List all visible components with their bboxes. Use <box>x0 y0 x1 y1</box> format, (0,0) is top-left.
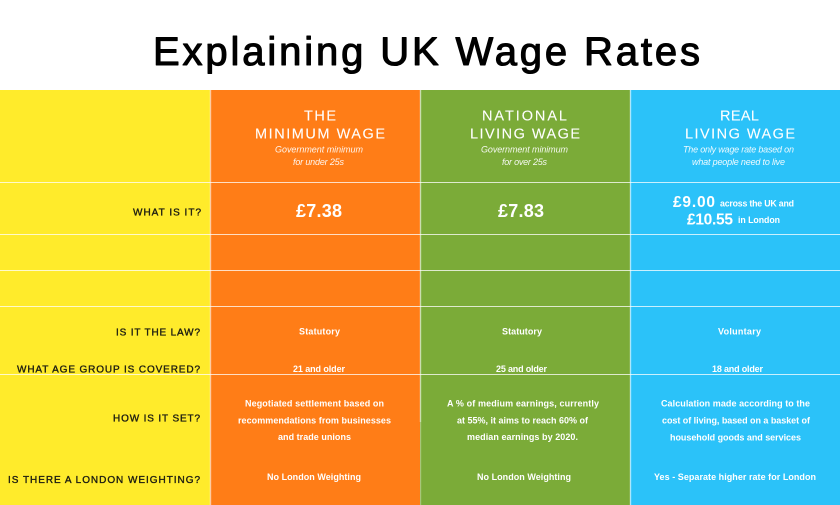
heading: real living wage: REAL <box>720 109 759 125</box>
panel: minimum wage column <box>210 90 420 505</box>
value: real living wage rates: in London <box>738 215 780 225</box>
label: how is it set: HOW IS IT SET? <box>113 413 200 424</box>
real living wage: how set <box>661 399 811 442</box>
title: Explaining UK Wage Rates <box>153 30 700 74</box>
subtitle: real living wage: The only wage rate based on <box>683 145 794 155</box>
label: london weighting: IS THERE A LONDON WEIGHTING? <box>8 475 200 486</box>
heading: national living wage: NATIONAL <box>482 109 567 125</box>
real living wage: how set: household goods and services <box>670 432 801 442</box>
minimum wage: london weighting: No London Weighting <box>267 472 361 482</box>
real living wage: law status: Voluntary <box>718 327 761 337</box>
national living wage: age group: 25 and older <box>496 364 547 374</box>
heading: real living wage: LIVING WAGE <box>685 127 795 143</box>
subtitle: national living wage: for over 25s <box>502 157 548 167</box>
national living wage: how set: A % of medium earnings, currently <box>447 399 599 409</box>
heading: national living wage <box>470 109 580 143</box>
national living wage: how set: at 55%, it aims to reach 60% of <box>457 415 589 425</box>
label: what is it: WHAT IS IT? <box>133 208 201 219</box>
value: minimum wage rate: £7.38 <box>296 201 342 221</box>
subtitle: real living wage <box>683 145 794 167</box>
value: real living wage rates <box>673 194 794 229</box>
heading: national living wage: LIVING WAGE <box>470 127 580 143</box>
heading: minimum wage <box>255 109 385 143</box>
subtitle: national living wage: Government minimum <box>481 145 568 155</box>
minimum wage: age group: 21 and older <box>293 364 345 374</box>
value: real living wage rates: £10.55 <box>687 212 733 229</box>
real living wage: how set: cost of living, based on a basket of <box>662 415 811 425</box>
subtitle: national living wage <box>481 145 568 167</box>
subtitle: minimum wage: for under 25s <box>293 157 344 167</box>
real living wage: age group: 18 and older <box>712 364 763 374</box>
minimum wage: law status: Statutory <box>299 327 340 337</box>
real living wage: london weighting: Yes - Separate higher rate for London <box>654 472 816 482</box>
panel: real living wage column <box>630 90 840 505</box>
minimum wage: how set: Negotiated settlement based on <box>245 399 384 409</box>
minimum wage: how set: and trade unions <box>278 432 351 442</box>
label: age group: WHAT AGE GROUP IS COVERED? <box>17 364 200 375</box>
national living wage: law status: Statutory <box>502 327 542 337</box>
label: is it the law: IS IT THE LAW? <box>116 327 200 338</box>
subtitle: real living wage: what people need to live <box>692 157 785 167</box>
value: national living wage rate: £7.83 <box>498 201 544 221</box>
heading: minimum wage: MINIMUM WAGE <box>255 127 385 143</box>
heading: minimum wage: THE <box>304 109 336 125</box>
subtitle: minimum wage: Government minimum <box>275 145 364 155</box>
real living wage: how set: Calculation made according to the <box>661 399 810 409</box>
panel: national living wage column <box>420 90 630 505</box>
national living wage: london weighting: No London Weighting <box>477 472 571 482</box>
value: real living wage rates: across the UK and <box>720 199 794 209</box>
national living wage: how set <box>447 399 599 442</box>
minimum wage: how set: recommendations from businesses <box>238 415 391 425</box>
minimum wage: how set <box>238 399 391 442</box>
value: real living wage rates: £9.00 <box>673 194 715 211</box>
heading: real living wage <box>685 109 795 143</box>
national living wage: how set: median earnings by 2020. <box>467 432 578 442</box>
panel: row labels column <box>0 90 210 505</box>
subtitle: minimum wage <box>275 145 364 167</box>
